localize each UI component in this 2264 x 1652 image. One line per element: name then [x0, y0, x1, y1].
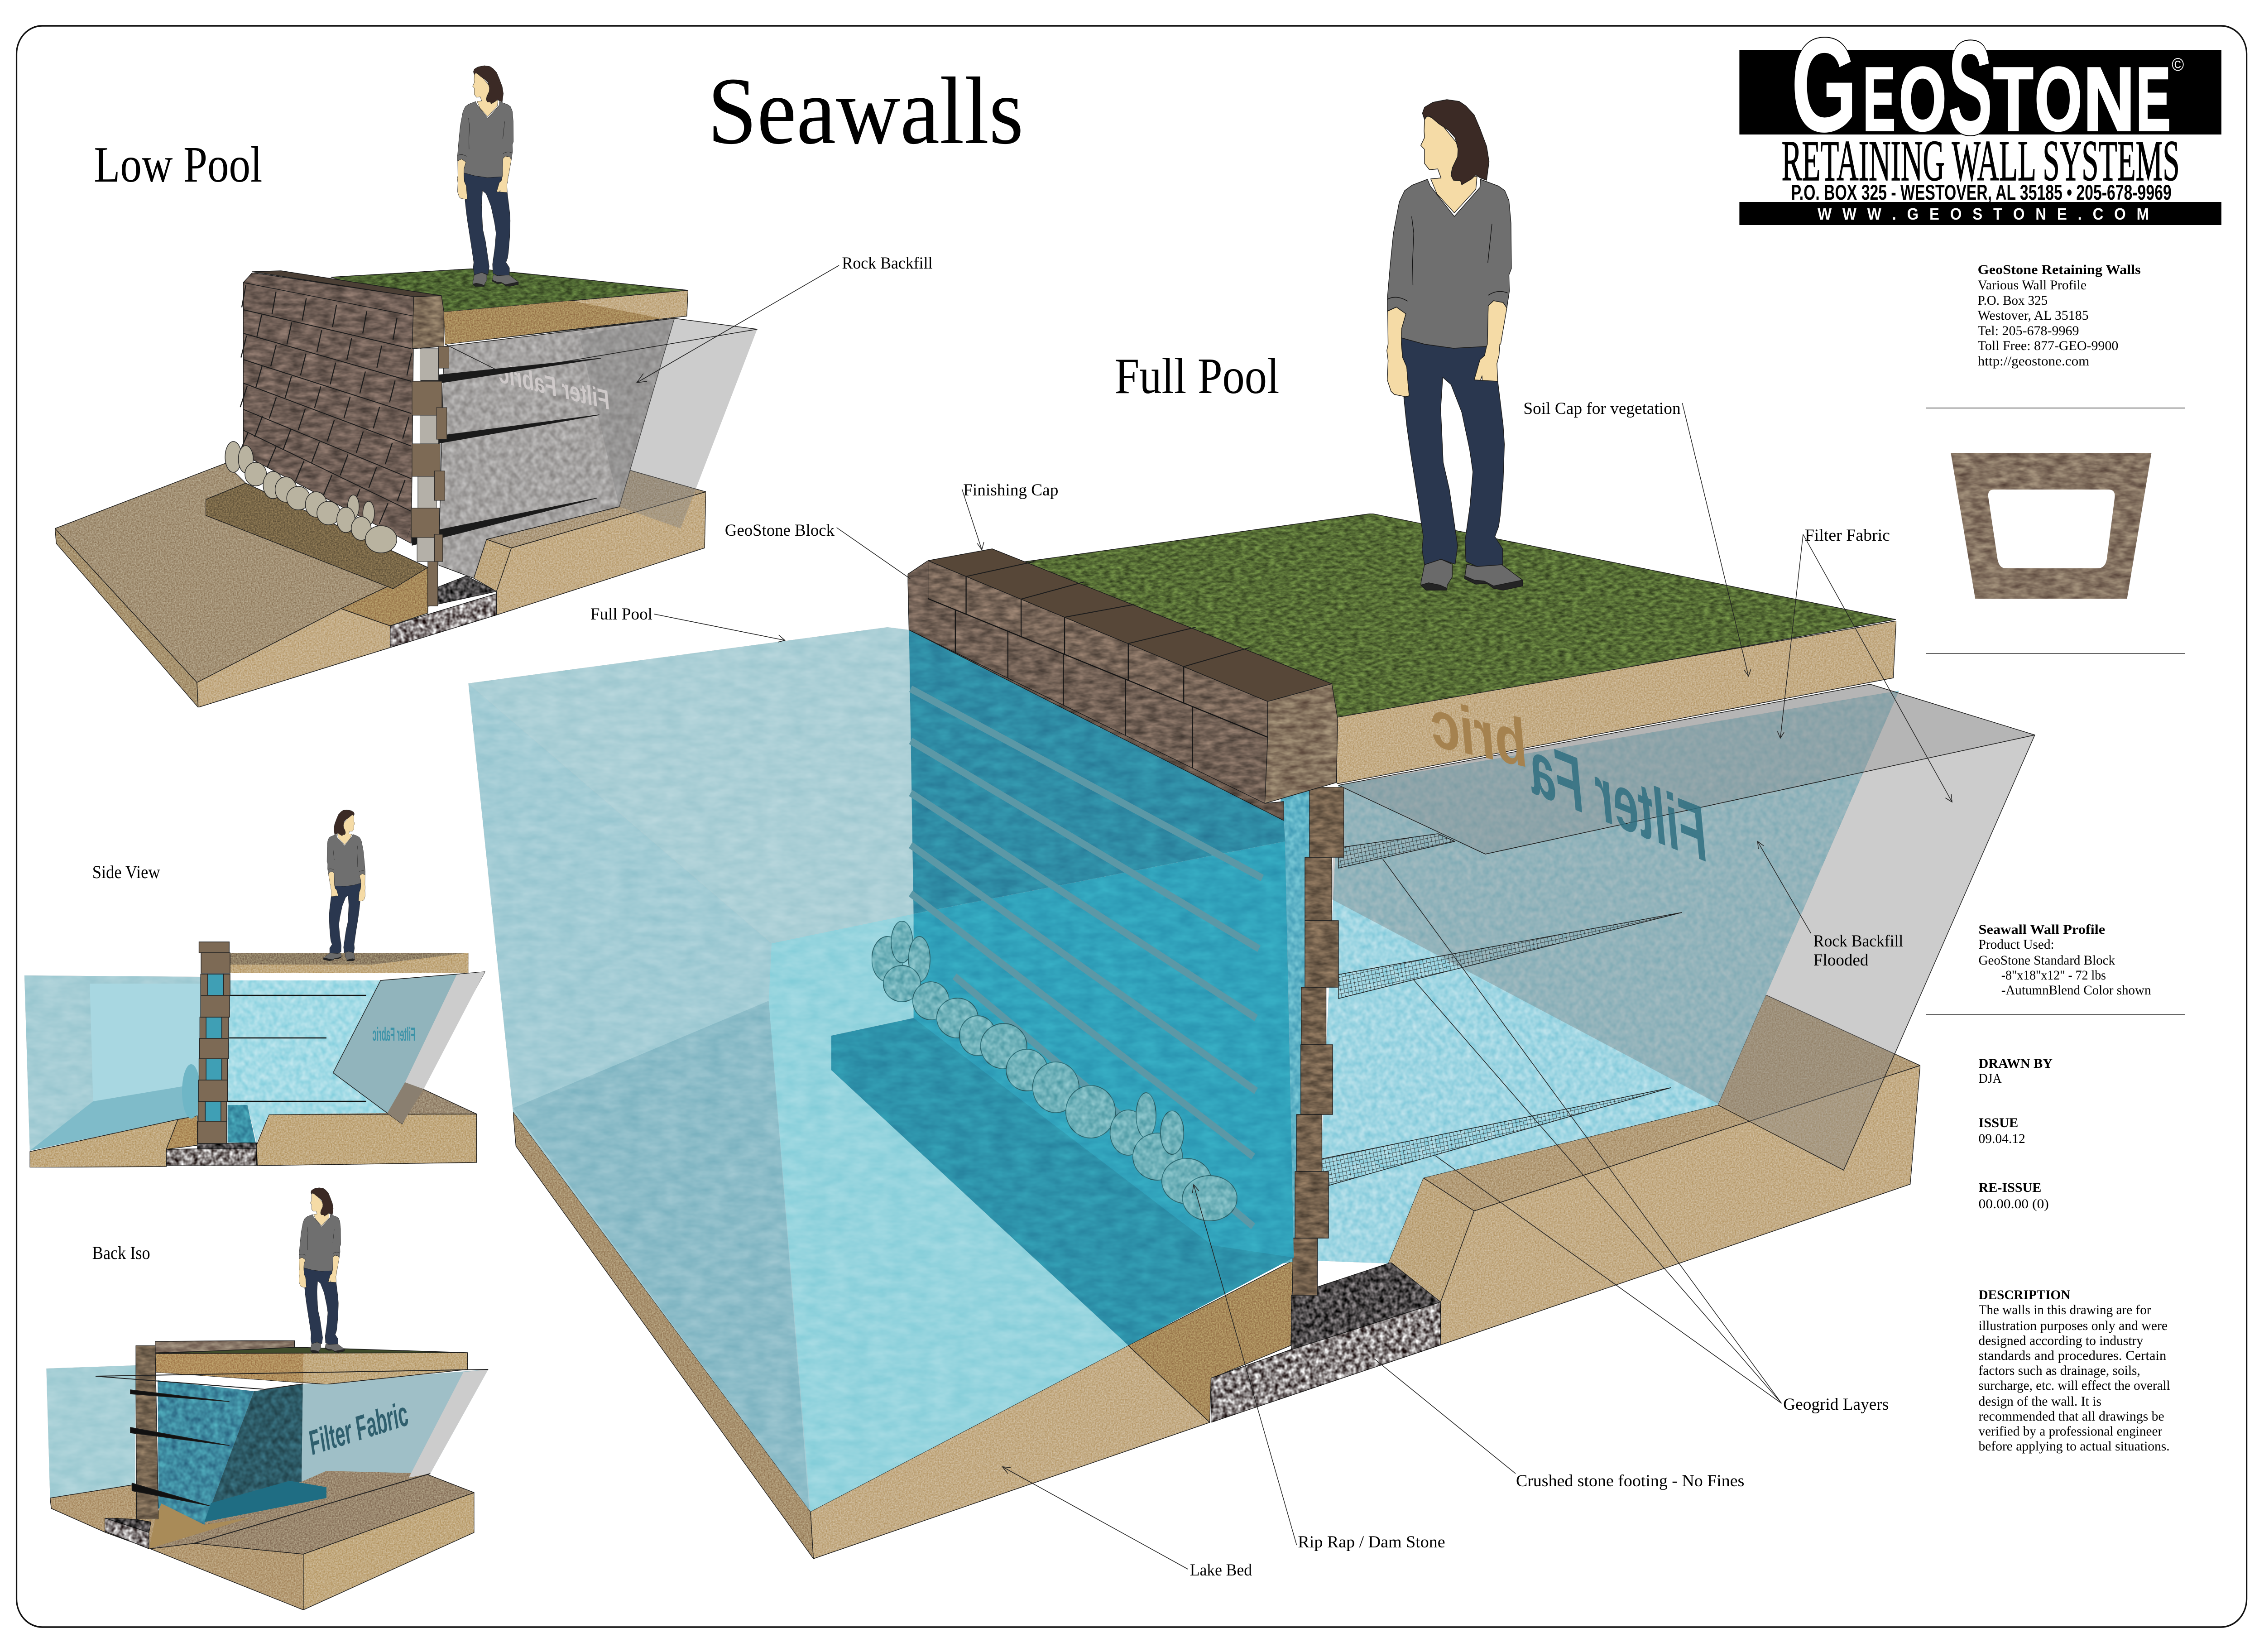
lake bed and soil base	[513, 995, 1920, 1559]
text block: re-issue: 00.00.00 (0)	[1979, 1196, 2049, 1211]
text block: product: GeoStone Standard Block	[1979, 953, 2115, 968]
heading: Back Iso: Back Iso	[92, 1244, 150, 1263]
label: Lake Bed: Lake Bed	[1190, 1561, 1252, 1579]
text block: description: before applying to actual situations.	[1979, 1439, 2170, 1454]
contact block: GeoStone Retaining Walls	[1978, 262, 2141, 277]
wall block joints	[928, 576, 1268, 768]
logo wordmark: N	[2084, 49, 2134, 149]
logo wordmark: E	[2136, 49, 2170, 149]
label: Filter Fabric: Filter Fabric	[1805, 526, 1890, 544]
label: GeoStone Block: GeoStone Block	[725, 521, 835, 539]
logo top bar	[1739, 50, 2221, 134]
text block: product	[1979, 922, 2151, 998]
low pool wall block joints	[243, 296, 411, 528]
filter fabric edge outline	[1718, 735, 2035, 1170]
label: Finishing Cap: Finishing Cap	[963, 480, 1058, 499]
diagram: Full Pool main section	[468, 100, 2035, 1559]
side view soil cap	[230, 953, 468, 973]
contact block: Tel: 205-678-9969	[1978, 323, 2079, 338]
text block: product: Product Used:	[1979, 937, 2054, 952]
side view water outer	[24, 975, 201, 1151]
label: Soil Cap for vegetation	[1523, 399, 1751, 676]
wall profile blocks	[1293, 787, 1344, 1296]
water left face lower shade	[513, 1001, 809, 1510]
contact block	[1978, 262, 2141, 369]
water floor	[769, 914, 1128, 1512]
low pool fabric top sheet	[445, 318, 757, 372]
low pool rip rap	[225, 442, 397, 553]
text block: description: standards and procedures. Certain	[1979, 1348, 2166, 1363]
side view gravel	[166, 1143, 257, 1166]
label: Rock Backfill Flooded: Rock Backfill	[1813, 932, 1903, 950]
crushed stone footing	[1211, 1263, 1441, 1422]
text block: drawn by: DRAWN BY	[1979, 1056, 2053, 1071]
back iso shelf	[204, 1481, 326, 1522]
label: Geogrid Layers	[1383, 859, 1889, 1413]
wall cap top joints	[966, 562, 1250, 667]
logo: GeoStone	[1739, 10, 2221, 225]
logo wordmark: S	[1948, 13, 1993, 163]
geogrid layers	[1322, 834, 1682, 1187]
contact block: Toll Free: 877-GEO-9900	[1978, 338, 2118, 353]
water body	[468, 627, 1294, 1512]
back iso fabric text: Filter Fabric	[305, 1395, 412, 1462]
label: Full Pool: Full Pool	[590, 605, 652, 623]
contact block: http://geostone.com	[1978, 354, 2089, 369]
person: Full Pool	[1387, 100, 1523, 590]
side view fabric light strip	[405, 972, 485, 1089]
back iso wall column	[136, 1345, 158, 1519]
text block: description: factors such as drainage, soils,	[1979, 1363, 2140, 1378]
label: Full Pool	[590, 605, 785, 642]
back iso fabric shaded rock	[211, 1384, 303, 1506]
diagram: Side View	[24, 810, 485, 1167]
side view water floor	[30, 1084, 199, 1151]
text block: drawn by: DJA	[1979, 1071, 2002, 1086]
title: Seawalls	[708, 58, 1024, 164]
wall end face	[1265, 684, 1338, 803]
back iso fabric	[302, 1369, 488, 1482]
back iso grass	[155, 1347, 468, 1354]
side view filter fabric	[333, 972, 485, 1124]
heading: Low Pool: Low Pool	[94, 137, 262, 193]
low pool filter fabric	[579, 318, 757, 528]
label: Filter Fabric	[1777, 526, 1952, 802]
low pool wall face	[243, 283, 414, 543]
logo tagline: RETAINING WALL SYSTEMS	[1782, 129, 2180, 193]
filter fabric top sheet	[1338, 684, 2035, 854]
logo wordmark: ©	[2172, 55, 2184, 75]
text block: description: design of the wall. It is	[1979, 1394, 2101, 1409]
text block: product: Seawall Wall Profile	[1979, 922, 2105, 937]
logo web bar	[1739, 202, 2221, 225]
label: Crushed stone footing: Crushed stone footing - No Fines	[1516, 1471, 1744, 1490]
contact block: Westover, AL 35185	[1978, 308, 2089, 323]
diagram: Low Pool	[55, 66, 757, 707]
label: Finishing Cap	[962, 480, 1058, 550]
contact block: P.O. Box 325	[1978, 293, 2048, 308]
text block: description: The walls in this drawing are for	[1979, 1302, 2151, 1317]
low pool rock backfill	[439, 318, 674, 578]
low pool grass	[331, 269, 688, 312]
logo address: P.O. BOX 325 - WESTOVER, AL 35185 • 205-678-9969	[1791, 180, 2172, 204]
contact block: Various Wall Profile	[1978, 278, 2087, 293]
blue rock fill behind face	[1281, 786, 1314, 1263]
low pool shelf	[206, 483, 428, 589]
label: Soil Cap for vegetation: Soil Cap for vegetation	[1523, 399, 1681, 418]
water left face	[468, 683, 811, 1512]
text block: issue: 09.04.12	[1979, 1131, 2025, 1146]
mirrored Filter Fabric lettering on soil: bric	[1427, 685, 1530, 782]
side view fabric over ledge	[387, 1082, 424, 1124]
text block: description	[1979, 1287, 2170, 1454]
back iso soil base	[50, 1467, 474, 1610]
grass top	[1010, 514, 1896, 719]
side view backfill	[228, 980, 387, 1143]
logo wordmark: E	[1863, 49, 1895, 149]
side view soil	[30, 1081, 477, 1167]
icon: block profile	[1951, 453, 2151, 599]
wall bottom course above water	[909, 630, 1284, 821]
low pool soil base	[55, 463, 706, 707]
submerged geogrid bands	[911, 689, 1262, 1226]
low pool wall cap	[243, 271, 444, 349]
logo wordmark: T	[1993, 49, 2033, 149]
back iso soil cap	[155, 1353, 468, 1384]
side view water inner	[90, 984, 201, 1101]
text block: re-issue: RE-ISSUE	[1979, 1180, 2041, 1195]
label: Rock Backfill Flooded: Flooded	[1813, 951, 1869, 969]
text block: description: verified by a professional engineer	[1979, 1424, 2163, 1439]
side view person	[324, 810, 365, 961]
logo web address: W W W . G E O S T O N E . C O M	[1818, 206, 2149, 223]
submerged wall through surface	[909, 630, 1285, 914]
back iso fabric top sheet line	[96, 1369, 488, 1543]
text block: description: illustration purposes only and were	[1979, 1318, 2168, 1333]
side view flooded footing rock	[228, 1105, 256, 1143]
logo wordmark	[1791, 10, 2184, 163]
low pool soil cap	[444, 290, 688, 344]
back iso person	[299, 1188, 345, 1353]
side view blue rock	[182, 1064, 200, 1119]
filter fabric lower sheet	[1330, 684, 2035, 1170]
label: Rock Backfill Flooded	[1758, 841, 1903, 969]
wall cap top	[928, 549, 1332, 701]
side view wall section	[198, 942, 230, 1143]
logo wordmark: O	[2035, 49, 2082, 149]
back iso brown soil	[149, 1503, 252, 1549]
label: Rock Backfill: Rock Backfill	[842, 254, 933, 272]
back iso gravel	[105, 1518, 151, 1549]
text block: drawn by	[1979, 1056, 2053, 1086]
logo wordmark: O	[1899, 49, 1946, 149]
label: Geogrid Layers: Geogrid Layers	[1783, 1395, 1889, 1413]
heading: Full Pool: Full Pool	[1115, 348, 1279, 404]
back iso fabric light strip	[409, 1369, 488, 1478]
flooded rock backfill	[1316, 691, 1899, 1263]
low pool gravel footing	[390, 576, 496, 648]
wall cap front	[928, 561, 1268, 737]
heading: Side View: Side View	[92, 863, 160, 882]
submerged shelf	[831, 1018, 1294, 1345]
text block: description: surcharge, etc. will effect the overall	[1979, 1378, 2170, 1393]
logo wordmark: G	[1791, 10, 1857, 160]
diagram: Back Iso	[46, 1188, 488, 1610]
text block: product: -AutumnBlend Color shown	[2001, 983, 2151, 998]
text block: issue: ISSUE	[1979, 1115, 2018, 1130]
label: GeoStone Block	[725, 521, 910, 579]
label: Rip Rap / Dam Stone	[1192, 1185, 1445, 1551]
low pool person	[457, 66, 518, 286]
text block: re-issue	[1979, 1180, 2049, 1211]
low pool mirrored fabric text: Filter Fabric	[497, 358, 611, 416]
text block: issue	[1979, 1115, 2025, 1146]
side view geogrid lines	[199, 995, 366, 1101]
back iso wall cap row	[155, 1340, 295, 1353]
back iso flooded rock	[158, 1380, 254, 1525]
submerged wall front	[914, 841, 1294, 1345]
text block: description: designed according to industry	[1979, 1333, 2144, 1348]
label: Lake Bed	[1002, 1467, 1252, 1579]
text block: description: DESCRIPTION	[1979, 1287, 2071, 1302]
text block: description: recommended that all drawings be	[1979, 1409, 2164, 1424]
water surface	[468, 627, 914, 943]
soil cap for vegetation	[1337, 621, 1896, 784]
label: Crushed stone footing	[1374, 1359, 1744, 1490]
mirrored Filter Fabric lettering on sheet: Filter Fa	[1525, 721, 1710, 879]
text block: product: -8"x18"x12" - 72 lbs	[2001, 968, 2106, 983]
label: Rock Backfill	[637, 254, 933, 383]
diagram: Side View: Filter Fabric	[372, 1023, 415, 1045]
low pool geogrid layers	[412, 358, 601, 545]
back iso water	[46, 1365, 136, 1498]
label: Rip Rap / Dam Stone: Rip Rap / Dam Stone	[1298, 1532, 1445, 1551]
low pool wall section blocks	[411, 346, 449, 606]
back iso geogrid wedges	[130, 1390, 229, 1506]
rip rap dam stone	[872, 921, 1237, 1221]
wall face above water	[908, 561, 1268, 803]
